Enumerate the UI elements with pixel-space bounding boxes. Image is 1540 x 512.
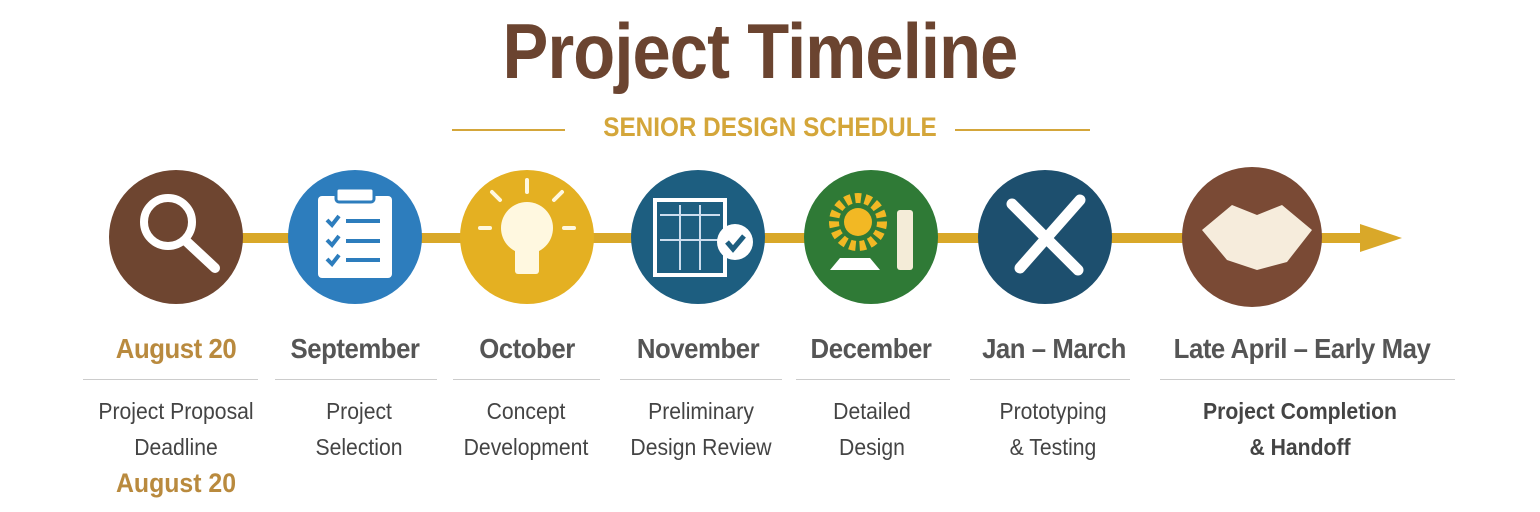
text: Project Proposal — [98, 398, 254, 424]
icon: gear and tools — [804, 170, 938, 304]
icon: clipboard — [288, 170, 422, 304]
text: Late April – Early May — [1174, 333, 1430, 364]
icon: magnifier — [109, 170, 243, 304]
icon: light bulb — [460, 170, 594, 304]
text: & Testing — [1010, 434, 1096, 460]
icon: handshake — [1182, 167, 1322, 307]
text: November — [637, 333, 759, 364]
step 1 — [83, 333, 258, 498]
text: Development — [464, 434, 588, 460]
title: Project Timeline — [503, 7, 1017, 95]
text: Jan – March — [982, 333, 1126, 364]
text: August 20 — [116, 468, 236, 498]
step 7 — [1160, 333, 1455, 460]
text: Detailed — [833, 398, 911, 424]
text: Preliminary — [648, 398, 754, 424]
icon: wrench and screwdriver — [978, 170, 1112, 304]
text: Prototyping — [999, 398, 1107, 424]
text: Design Review — [630, 434, 772, 460]
subtitle: SENIOR DESIGN SCHEDULE — [603, 112, 937, 142]
text: & Handoff — [1249, 434, 1351, 460]
text: Project — [326, 398, 392, 424]
icon: blueprint — [631, 170, 765, 304]
text: Selection — [315, 434, 403, 460]
step 3 — [453, 333, 600, 460]
text: Project Completion — [1203, 398, 1397, 424]
step 6 — [970, 333, 1130, 460]
step 4 — [620, 333, 782, 460]
text: October — [479, 333, 575, 364]
text: Concept — [487, 398, 565, 424]
step 5 — [796, 333, 950, 460]
arrow line — [110, 224, 1402, 252]
text: December — [811, 333, 931, 364]
text: September — [290, 333, 420, 364]
text: August 20 — [116, 333, 236, 364]
text: Design — [839, 434, 905, 460]
text: Deadline — [134, 434, 218, 460]
step 2 — [275, 333, 437, 460]
